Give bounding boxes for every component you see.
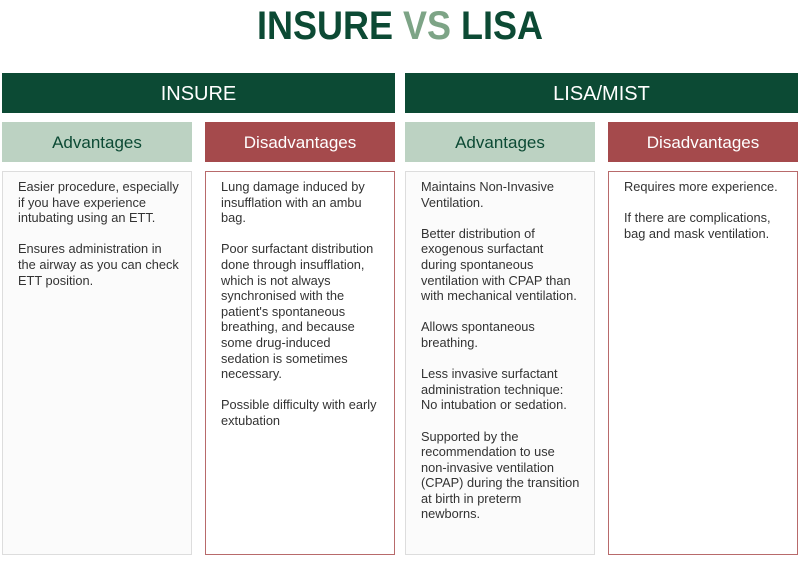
panel: LISA advantages: during spontaneous [421,257,533,272]
panel: INSURE disadvantages: Lung damage induced by [221,179,365,194]
panel: LISA advantages: Supported by the [421,428,518,444]
panel: LISA disadvantages [608,171,798,555]
panel: INSURE disadvantages: breathing, and because [221,319,355,334]
panel: LISA advantages [405,171,595,555]
panel: LISA advantages: (CPAP) during the transition [421,475,579,490]
panel: LISA advantages: Ventilation. [421,195,484,210]
title: INSURE VS LISA [257,4,543,48]
panel: INSURE disadvantages: Possible difficulty with early [221,397,377,412]
panel: INSURE advantages: Easier procedure, especially [18,179,179,194]
panel: INSURE disadvantages: some drug-induced [221,335,331,350]
panel: INSURE disadvantages: extubation [221,413,280,428]
panel: LISA advantages: with mechanical ventilation. [421,288,577,303]
panel: LISA advantages: Allows spontaneous [421,319,535,334]
subheader: LISA disadvantages: Disadvantages [647,133,759,152]
panel: INSURE disadvantages: Poor surfactant distribution [221,241,373,256]
panel: LISA advantages: Better distribution of [421,226,535,241]
panel: LISA advantages: administration technique: [421,382,563,397]
panel: INSURE advantages: intubating using an ETT. [18,210,155,225]
header: INSURE: INSURE [161,83,236,105]
panel: LISA advantages: breathing. [421,335,478,350]
panel: INSURE advantages [2,171,192,555]
panel: INSURE disadvantages: synchronised with the [221,288,344,303]
panel: INSURE disadvantages: sedation is sometimes [221,351,348,366]
panel: LISA advantages: recommendation to use [421,444,555,459]
subheader: INSURE advantages: Advantages [52,133,142,152]
panel: INSURE disadvantages: patient's spontaneous [221,304,345,319]
panel: INSURE disadvantages: bag. [221,210,246,225]
panel: LISA advantages: No intubation or sedation. [421,397,567,412]
panel: INSURE advantages: Ensures administration in [18,241,162,256]
panel: LISA advantages: Less invasive surfactant [421,366,558,381]
panel: INSURE advantages: the airway as you can check [18,257,179,272]
panel: INSURE disadvantages: insufflation with an ambu [221,195,362,210]
panel: LISA disadvantages: Requires more experience. [624,179,778,194]
panel: LISA disadvantages: If there are complications, [624,210,771,225]
panel: LISA advantages: newborns. [421,506,480,521]
subheader: LISA advantages [405,122,595,162]
subheader: INSURE disadvantages: Disadvantages [244,133,356,152]
subheader: LISA advantages: Advantages [455,133,545,152]
panel: INSURE disadvantages: necessary. [221,366,282,381]
panel: LISA disadvantages: bag and mask ventilation. [624,226,769,241]
panel: INSURE disadvantages [205,171,395,555]
panel: INSURE disadvantages: which is not always [221,273,331,288]
panel: INSURE advantages: ETT position. [18,273,93,288]
panel: INSURE disadvantages: done through insufflation, [221,257,364,272]
header: INSURE [2,73,395,113]
panel: INSURE advantages: if you have experience [18,195,146,210]
subheader: INSURE advantages [2,122,192,162]
subheader: LISA disadvantages [608,122,798,162]
panel: LISA advantages: exogenous surfactant [421,241,543,256]
panel: LISA advantages: ventilation with CPAP than [421,273,571,288]
panel: LISA advantages: Maintains Non-Invasive [421,179,554,194]
subheader: INSURE disadvantages [205,122,395,162]
panel: LISA advantages: at birth in preterm [421,491,521,506]
header: LISA/MIST [405,73,798,113]
header: LISA/MIST: LISA/MIST [553,83,650,105]
panel: LISA advantages: non-invasive ventilation [421,460,554,475]
